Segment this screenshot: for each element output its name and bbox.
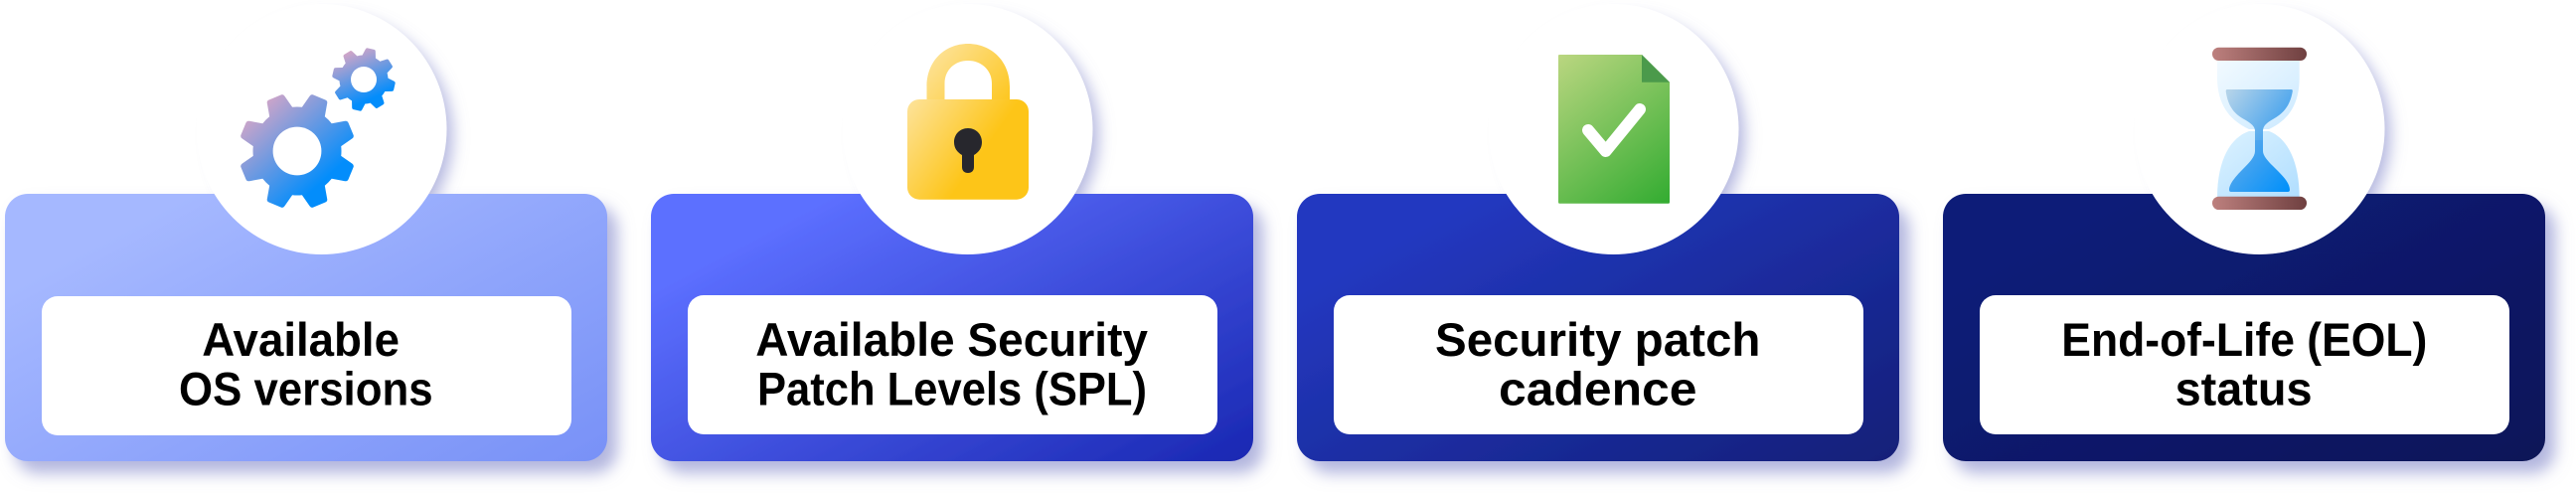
- label text: Available: [202, 313, 400, 366]
- label text: OS versions: [179, 362, 433, 414]
- label text: [1435, 313, 1760, 414]
- label box: [688, 295, 1217, 434]
- icon: padlock: [907, 44, 1029, 200]
- label box: [1334, 295, 1863, 434]
- icon: document with check mark: [1558, 55, 1670, 204]
- icon: hourglass: [2212, 48, 2307, 210]
- icon badge circle: [1489, 4, 1739, 254]
- panel: security patch cadence: [1297, 4, 1899, 461]
- panel: available OS versions: [5, 4, 607, 461]
- icon badge circle: [2135, 4, 2385, 254]
- label text: Available Security: [755, 313, 1148, 366]
- label text: Patch Levels (SPL): [757, 362, 1147, 414]
- label box: [42, 296, 571, 435]
- panel: available security patch levels: [651, 4, 1253, 461]
- label text: End-of-Life (EOL): [2061, 313, 2427, 366]
- icon: gears: [241, 48, 396, 208]
- label text: [755, 313, 1148, 414]
- card background: [1943, 194, 2545, 461]
- card background: [651, 194, 1253, 461]
- panel: end-of-life status: [1943, 4, 2545, 461]
- icon badge circle: [197, 4, 447, 254]
- label text: Security patch: [1435, 313, 1760, 366]
- card background: [5, 194, 607, 461]
- card background: [1297, 194, 1899, 461]
- label text: [179, 313, 433, 414]
- icon badge circle: [843, 4, 1093, 254]
- label text: cadence: [1499, 362, 1697, 414]
- label text: [2061, 313, 2427, 414]
- label box: [1980, 295, 2509, 434]
- label text: status: [2175, 362, 2313, 414]
